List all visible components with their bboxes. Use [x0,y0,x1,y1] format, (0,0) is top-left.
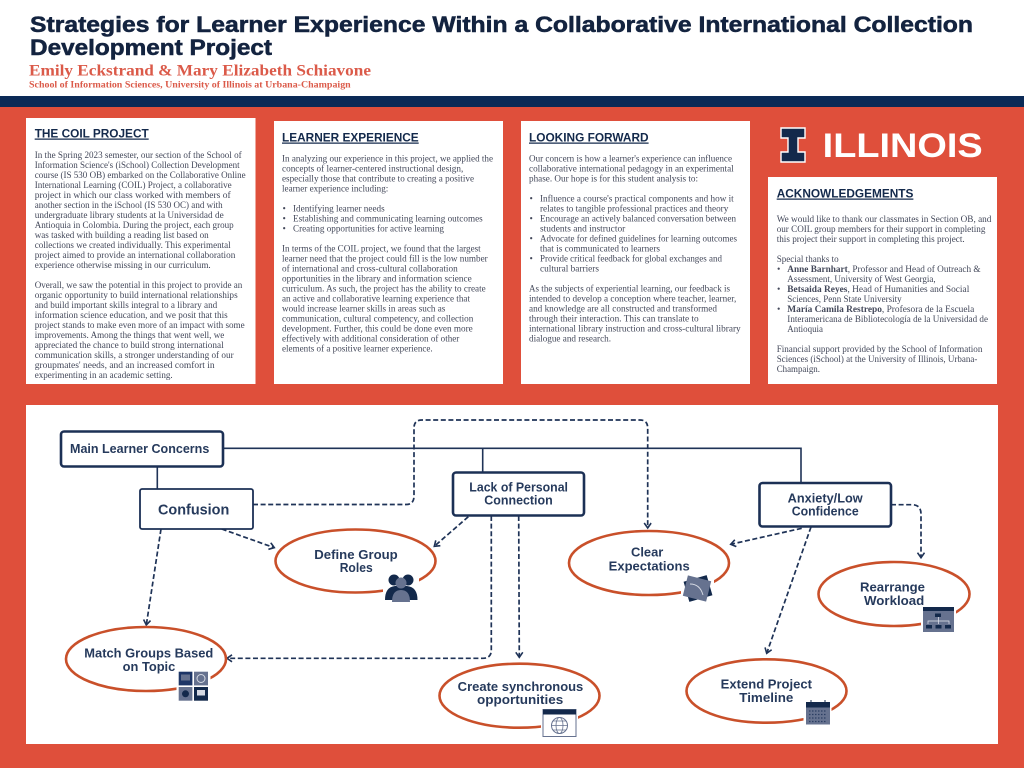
oval: create synchronous opportunities [440,664,600,738]
wordmark: ILLINOIS [823,127,983,165]
text block: learner experience: development. Further, this could be done even more [282,324,473,334]
text block: COIL description: project in which our class worked with members of [35,190,231,201]
text block: learner experience: • [282,224,286,234]
text block: learner experience: elements of a positive learner experience. [282,344,433,354]
text block: COIL description: improvements. Among the things that went well, we [35,330,224,341]
box: lack of personal connection: Lack of Personal [469,480,568,494]
text block: looking forward: students and instructor [540,224,626,234]
text block: learner experience: learner experience including: [282,184,388,194]
text block: looking forward: and knowledge are all constructed and transformed [529,304,717,314]
affiliation: School of Information Sciences, University of Illinois at Urbana-Champaign [29,80,351,90]
text block: learner experience: In analyzing our experience in this project, we applied the [282,154,493,164]
text block: looking forward: • [530,254,533,264]
icon: browser globe [541,708,578,738]
text block: looking forward: that is communicated to learners [540,244,660,254]
text block: looking forward: Influence a course's practical components and how it [540,194,734,204]
heading: acknowledgements: ACKNOWLEDGEMENTS [777,186,913,200]
text block: acknowledgements: this project their support in completing this project. [777,234,965,245]
text block: looking forward: • [530,194,533,204]
logo: Illinois [781,127,983,165]
oval: match groups based on topic: on Topic [123,660,175,674]
text block: COIL description [35,150,246,381]
text block: learner experience: of international and cross-cultural collaboration [282,264,458,274]
heading: learner experience: LEARNER EXPERIENCE [282,130,419,144]
icon: strategy board [681,574,714,604]
text block: looking forward: phase. Our hope is for this student analysis to: [529,174,698,184]
icon: block I [781,128,805,162]
text block: looking forward: • [530,214,533,224]
oval: define group roles: Define Group [314,548,398,562]
text block: looking forward: dialogue and research. [529,334,611,344]
title: Development Project [30,35,273,60]
text block: COIL description: collections we created individually. This experimental [35,240,231,251]
text block: looking forward: • [530,234,533,244]
text block: COIL description: experimenting in an academic setting. [35,370,173,381]
text block: COIL description: course (IS 530 OB) embarked on the Collaborative Online [35,170,246,181]
oval: define group roles [276,530,436,603]
text block: learner experience: Establishing and communicating learning outcomes [293,214,483,224]
text block: COIL description: appreciated the chance to build strong international [35,340,224,351]
text block: learner experience: effectively with additional consideration of other [282,334,460,344]
text block: looking forward: Our concern is how a learner's experience can influence [529,154,732,164]
box: anxiety / low confidence: Confidence [792,504,859,518]
text block: learner experience: Creating opportunities for active learning [293,224,444,234]
text block: COIL description: project stands to make even more of an impact with some [35,320,245,331]
title [30,12,973,60]
panel: acknowledgements [768,177,997,384]
oval: define group roles: Roles [340,561,373,575]
text block: looking forward: Provide critical feedback for global exchanges and [540,254,722,264]
panel: the COIL project [26,118,256,384]
text block: COIL description: information science education, and we posit that this [35,310,228,321]
text block: learner experience: especially those that contribute to creating a positive [282,174,474,184]
text block: COIL description: was tasked with building a reading list based on [35,230,209,241]
text block: COIL description: organic opportunity to build international relationships [35,290,238,301]
box: confusion: Confusion [158,502,229,518]
box: lack of personal connection [453,472,584,516]
text block: learner experience: • [282,214,286,224]
text block: acknowledgements: Special thanks to [777,254,839,265]
oval: create synchronous opportunities: opportunities [477,693,563,707]
title: Strategies for Learner Experience Within a Collaborative International Collection [30,12,973,37]
box: main learner concerns [61,432,223,466]
text block: learner experience: an active and collaborative learning experience that [282,294,470,304]
heading: the COIL project: THE COIL PROJECT [35,126,149,140]
icon: people [383,572,419,603]
text block: looking forward: through their interaction. This can translate to [529,314,699,324]
text block: learner experience: curriculum. As such, the project has the ability to create [282,284,486,294]
text block: acknowledgements: Champaign. [777,364,820,375]
oval: extend project timeline: Extend Project [721,678,813,692]
text block: acknowledgements: Betsaida Reyes, Head of Humanities and Social [787,284,970,295]
text block: acknowledgements: Financial support provided by the School of Information [777,344,983,355]
text block: looking forward [529,154,741,344]
oval: clear expectations: Expectations [609,560,690,574]
text block: learner experience: • [282,204,286,214]
text block: COIL description: International Learning (COIL) Project, a collaborative [35,180,232,191]
oval: extend project timeline: Timeline [739,691,793,705]
text block: COIL description: project aimed to provide an international collaboration [35,250,235,261]
text block: acknowledgements: our COIL group members for their support in completing [777,224,986,235]
box: main learner concerns: Main Learner Concerns [70,442,209,456]
connector lines [157,448,801,489]
oval: clear expectations: Clear [631,546,663,560]
text block: learner experience: concepts of learner-centered instructional design, [282,164,463,174]
text block: COIL description: undergraduate library students at la Universidad de [35,210,224,221]
text block: learner experience: In terms of the COIL project, we found that the largest [282,244,481,254]
panel: looking forward [521,121,750,384]
panel: learner experience [274,121,503,384]
text block: looking forward: Encourage an actively balanced conversation between [540,214,736,224]
text block: learner experience: Identifying learner needs [293,204,385,214]
icon: topic tiles [176,670,210,702]
heading: looking forward: LOOKING FORWARD [529,130,649,144]
text block: looking forward: relates to tangible professional practices and theory [540,204,728,214]
text block: acknowledgements: • [777,264,780,275]
box: anxiety / low confidence: Anxiety/Low [788,492,863,506]
panel: concept diagram [26,405,998,744]
header band [0,0,1024,107]
text block: COIL description: another section in the iSchool (IS 530 OC) and with [35,200,223,211]
text block: COIL description: and build important skills integral to a library and [35,300,217,311]
text block: COIL description: communication skills, a stronger understanding of our [35,350,234,361]
text block: COIL description: Information Science's (iSchool) Collection Development [35,160,240,171]
text block: looking forward: international library instruction and cross-cultural library [529,324,741,334]
text block: learner experience: learner need that the project could fill is the low number [282,254,488,264]
oval: create synchronous opportunities: Create synchronous [458,680,583,694]
text block: acknowledgements: • [777,304,780,315]
text block: COIL description: In the Spring 2023 semester, our section of the School of [35,150,242,161]
box: confusion [140,489,253,529]
text block: acknowledgements: • [777,284,780,295]
box: anxiety / low confidence [760,483,891,526]
text block: acknowledgements: Sciences (iSchool) at the University of Illinois, Urbana- [777,354,977,365]
text block: looking forward: As the subjects of experiential learning, our feedback is [529,284,730,294]
oval: rearrange workload: Workload [864,594,924,608]
text block: COIL description: groupmates' needs, and an increased comfort in [35,360,215,371]
text block: looking forward: collaborative international pedagogy in an experimental [529,164,734,174]
text block: learner experience: opportunities in the library and information science [282,274,472,284]
text block: acknowledgements: Anne Barnhart, Professor and Head of Outreach & [787,264,981,275]
text block: acknowledgements: Antioquia [787,324,824,335]
oval: rearrange workload: Rearrange [860,580,925,594]
text block: acknowledgements: María Camila Restrepo, Profesora de la Escuela [787,304,975,315]
text block: COIL description: experience otherwise missing in our curriculum. [35,260,211,271]
oval: rearrange workload [818,562,970,634]
text block: looking forward: cultural barriers [540,264,599,274]
oval: clear expectations [569,531,729,604]
text block: learner experience: communication, cultural competency, and collection [282,314,473,324]
icon: calendar [804,699,832,726]
box: lack of personal connection: Connection [484,493,553,507]
text block: learner experience [282,154,493,354]
oval: extend project timeline [686,659,846,726]
text block: acknowledgements [777,214,992,375]
text block: acknowledgements: Interamericana de Bibliotecología de la Universidad de [787,314,988,325]
text block: acknowledgements: Sciences, Penn State University [787,294,902,305]
text block: learner experience: would increase learner skills in areas such as [282,304,446,314]
text block: COIL description: Overall, we saw the potential in this project to provide an [35,280,242,291]
text block: looking forward: intended to develop a conception where teacher, learner, [529,294,736,304]
text block: acknowledgements: We would like to thank our classmates in Section OB, and [777,214,992,225]
text block: acknowledgements: Assessment, University of West Georgia, [787,274,936,285]
dashed arrows [146,420,921,658]
text block: looking forward: Advocate for defined guidelines for learning outcomes [540,234,737,244]
text block: COIL description: Antioquia in Colombia. During the project, each group [35,220,234,231]
oval: match groups based on topic: Match Groups Based [84,646,213,660]
icon: org chart window [921,605,956,634]
oval: match groups based on topic [66,627,226,702]
authors: Emily Eckstrand & Mary Elizabeth Schiavone [29,62,371,80]
